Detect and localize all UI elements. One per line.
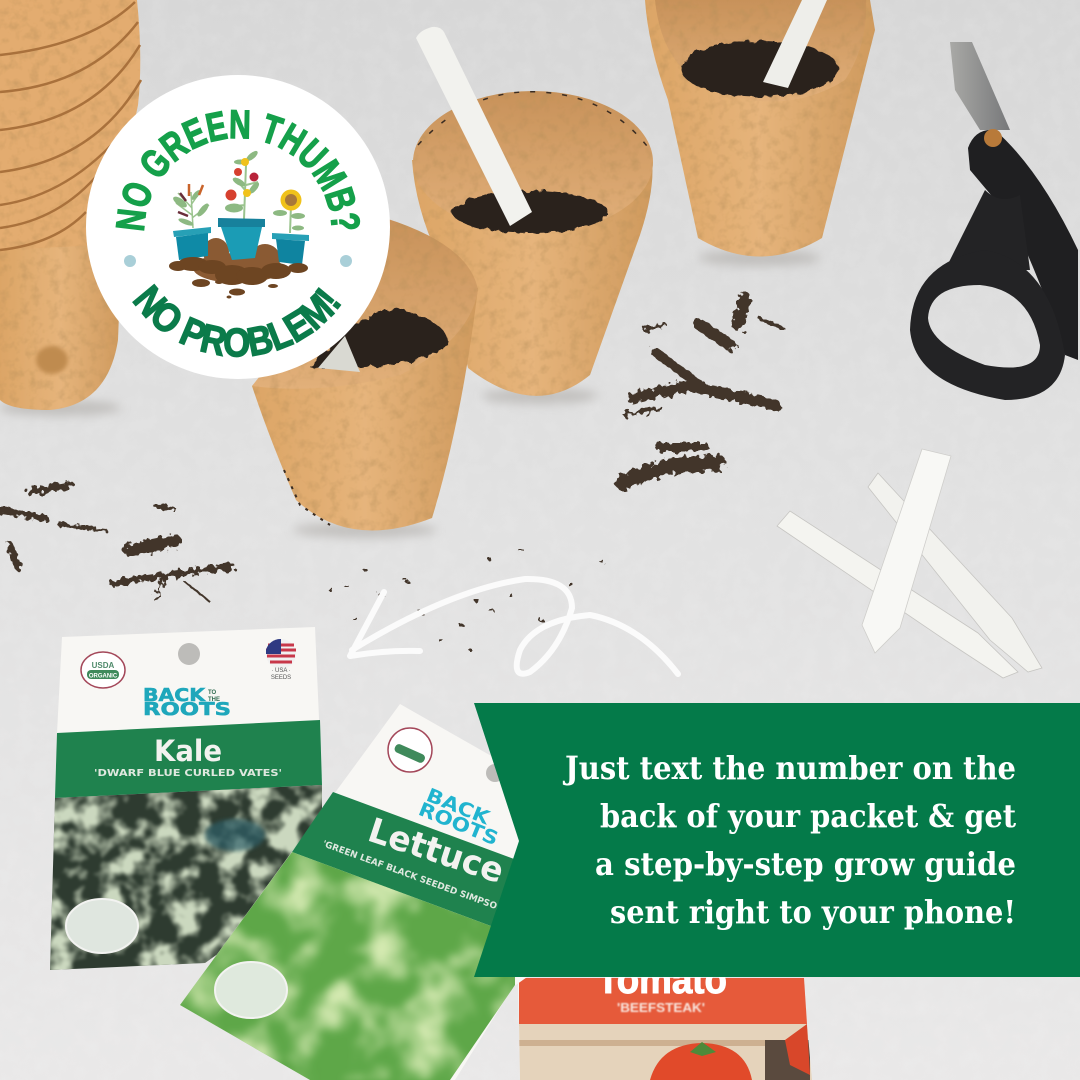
callout text: a step-by-step grow guide (595, 845, 1016, 883)
soil in front of pots (169, 257, 308, 298)
seed packet: lettuce (170, 704, 530, 1080)
Back to the Roots logo: THE (208, 697, 220, 703)
center tomato plant (218, 149, 265, 260)
USDA organic seal (388, 728, 432, 772)
peat pot: middle with label (412, 27, 653, 396)
plant label in pot (763, 0, 827, 88)
plant label in pot (416, 27, 532, 226)
punched hole (486, 764, 504, 782)
packet variety: 'GREEN LEAF BLACK SEEDED SIMPSON' (321, 839, 508, 916)
white plant labels (777, 449, 1042, 678)
Back to the Roots logo (415, 783, 507, 850)
punched hole (178, 643, 200, 665)
scissors (910, 42, 1078, 400)
callout text (562, 749, 1016, 931)
heirloom seal (66, 899, 138, 953)
USA seeds flag: SEEDS (271, 675, 291, 681)
right sunflower plant (272, 190, 309, 265)
Back to the Roots logo: TO (208, 690, 217, 696)
callout text: sent right to your phone! (610, 893, 1016, 931)
peat pot: front (252, 218, 478, 530)
callout text: back of your packet & get (600, 797, 1016, 835)
USDA organic seal (81, 652, 125, 688)
stack of peat pots (0, 0, 141, 410)
packet title: Tomato (597, 958, 727, 1002)
packet variety: 'BEEFSTEAK' (617, 1000, 705, 1015)
Back to the Roots logo (143, 685, 231, 720)
Back to the Roots logo: ROOTS (143, 699, 231, 720)
loose soil debris (0, 298, 782, 650)
badge: no green thumb (86, 75, 390, 379)
heirloom seal (215, 962, 287, 1018)
badge heading bottom: NO PROBLEM! (132, 284, 342, 358)
badge heading top: NO GREEN THUMB? (116, 110, 360, 231)
packet variety: 'DWARF BLUE CURLED VATES' (94, 768, 282, 779)
USA seeds flag (266, 639, 296, 681)
soil behind pots (193, 238, 283, 283)
Back to the Roots logo: BACK (423, 784, 494, 830)
USDA organic seal: USDA (92, 661, 115, 670)
packet title: Lettuce (363, 811, 509, 892)
Back to the Roots logo: ROOTS (415, 798, 501, 850)
USA seeds flag: · USA · (271, 668, 291, 674)
decorative dots (124, 255, 352, 267)
seed packet: kale (45, 627, 330, 975)
peat pot: top right (645, 0, 875, 256)
Back to the Roots logo: BACK (143, 685, 206, 706)
icon: potted plants in soil (169, 149, 309, 298)
green callout banner (474, 703, 1080, 977)
arrow (350, 579, 678, 674)
USDA organic seal: ORGANIC (89, 674, 118, 680)
seed packet: tomato (518, 977, 812, 1080)
left plant (171, 184, 211, 260)
packet title: Kale (154, 734, 222, 768)
callout text: Just text the number on the (562, 749, 1016, 787)
